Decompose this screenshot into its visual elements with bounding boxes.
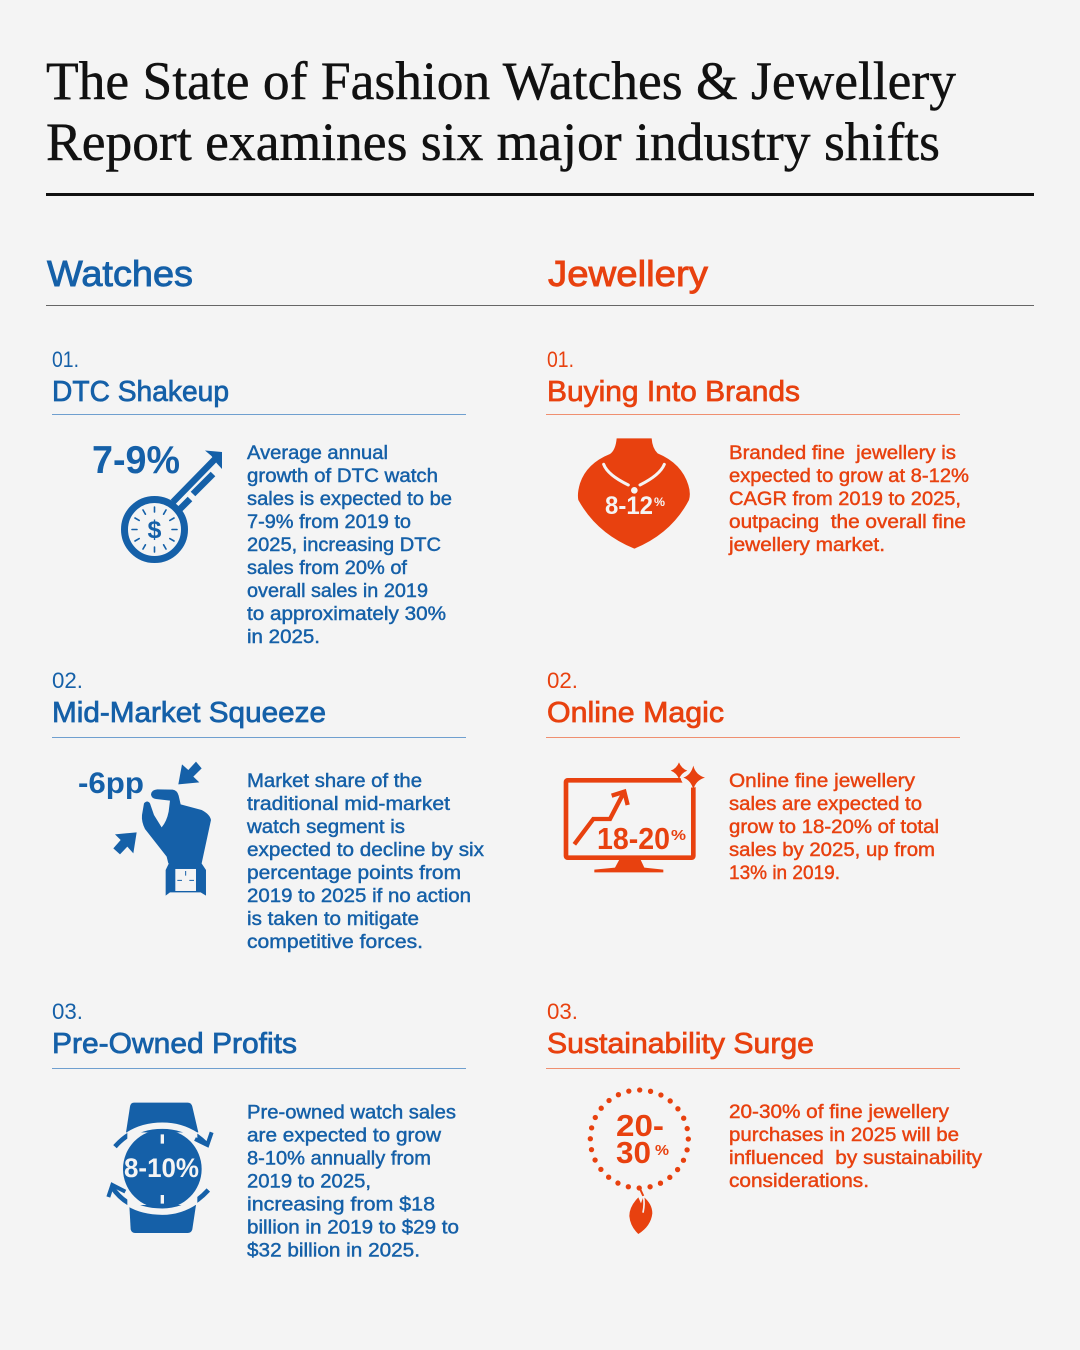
icon: beaded ring with leaf: 20- bbox=[616, 1108, 664, 1143]
description text: is taken to mitigate bbox=[247, 908, 419, 930]
description text: growth of DTC watch bbox=[247, 465, 438, 487]
section heading: DTC Shakeup bbox=[52, 376, 229, 408]
icon: beaded ring with leaf: % bbox=[655, 1142, 669, 1159]
description text: sales from 20% of bbox=[247, 557, 408, 579]
description text: purchases in 2025 will be bbox=[729, 1124, 959, 1146]
panel: jewellery 02 bbox=[546, 668, 960, 884]
icon: pinching hand with watch: -6pp bbox=[78, 767, 144, 800]
section heading: Buying Into Brands bbox=[547, 376, 800, 408]
panel: watches 02 bbox=[52, 668, 484, 953]
description text: increasing from $18 bbox=[247, 1194, 435, 1216]
icon: clock with rising arrow: 7-9% bbox=[92, 439, 180, 482]
section heading: Pre-Owned Profits bbox=[52, 1028, 297, 1060]
description text: considerations. bbox=[729, 1170, 869, 1192]
section number: 03. bbox=[52, 999, 83, 1024]
description text: 2019 to 2025 if no action bbox=[247, 885, 471, 907]
description text bbox=[729, 770, 939, 884]
description text: jewellery market. bbox=[728, 534, 885, 556]
title bbox=[46, 51, 956, 172]
description text: sales is expected to be bbox=[247, 488, 452, 510]
description text: Market share of the bbox=[247, 770, 422, 792]
section heading: Sustainability Surge bbox=[547, 1028, 814, 1060]
icon: beaded ring with leaf: 30 bbox=[616, 1135, 651, 1170]
description text: 8-10% annually from bbox=[247, 1148, 431, 1170]
panel: watches 01 bbox=[52, 347, 466, 648]
description text: competitive forces. bbox=[247, 931, 423, 953]
description text: sales are expected to bbox=[729, 793, 922, 815]
icon: monitor with rising chart: % bbox=[671, 827, 686, 844]
description text: Branded fine jewellery is bbox=[729, 442, 956, 464]
title: The State of Fashion Watches & Jewellery bbox=[46, 51, 956, 111]
description text: 7-9% from 2019 to bbox=[247, 511, 411, 533]
panel: jewellery 01 bbox=[546, 347, 969, 556]
icon: watch with cycle arrows bbox=[108, 1103, 212, 1233]
icon: pinching hand with watch bbox=[78, 762, 211, 896]
description text: are expected to grow bbox=[247, 1124, 442, 1146]
section number: 02. bbox=[52, 668, 83, 693]
description text bbox=[247, 442, 452, 648]
description text: 2019 to 2025, bbox=[247, 1170, 371, 1192]
title: Report examines six major industry shifts bbox=[46, 112, 940, 172]
icon: clock with rising arrow bbox=[92, 439, 222, 560]
icon: monitor with rising chart bbox=[566, 762, 705, 872]
description text: 20-30% of fine jewellery bbox=[729, 1101, 949, 1123]
description text bbox=[246, 770, 484, 953]
description text: billion in 2019 to $29 to bbox=[247, 1216, 459, 1238]
description text: grow to 18-20% of total bbox=[729, 816, 939, 838]
heading: Jewellery: Jewellery bbox=[548, 253, 708, 294]
icon: beaded ring with leaf bbox=[590, 1090, 688, 1234]
description text: in 2025. bbox=[247, 626, 320, 648]
description text: Pre-owned watch sales bbox=[247, 1102, 456, 1124]
description text bbox=[728, 442, 969, 556]
description text: traditional mid-market bbox=[247, 793, 451, 815]
description text: $32 billion in 2025. bbox=[247, 1240, 420, 1262]
icon: watch with cycle arrows: 8-10% bbox=[124, 1153, 199, 1183]
description text: expected to grow at 8-12% bbox=[729, 465, 969, 487]
description text: percentage points from bbox=[247, 862, 461, 884]
description text: to approximately 30% bbox=[247, 603, 446, 625]
icon: clock with rising arrow: $ bbox=[148, 516, 162, 544]
description text: watch segment is bbox=[246, 816, 405, 838]
heading: Watches: Watches bbox=[47, 253, 193, 294]
description text: expected to decline by six bbox=[247, 839, 484, 861]
icon: necklace on bust: % bbox=[654, 495, 665, 509]
section number: 03. bbox=[547, 999, 578, 1024]
section number: 01. bbox=[52, 347, 79, 372]
section number: 02. bbox=[547, 668, 578, 693]
section number: 01. bbox=[547, 347, 574, 372]
panel: jewellery 03 bbox=[546, 999, 982, 1234]
description text: sales by 2025, up from bbox=[729, 839, 935, 861]
panel: watches 03 bbox=[52, 999, 466, 1262]
description text: 2025, increasing DTC bbox=[247, 534, 441, 556]
icon: necklace on bust bbox=[578, 438, 690, 549]
icon: monitor with rising chart: 18-20 bbox=[597, 821, 670, 856]
description text: influenced by sustainability bbox=[729, 1147, 982, 1169]
icon: necklace on bust: 8-12 bbox=[605, 492, 653, 520]
description text: outpacing the overall fine bbox=[729, 511, 966, 533]
description text: overall sales in 2019 bbox=[247, 580, 428, 602]
description text: 13% in 2019. bbox=[729, 862, 840, 884]
section heading: Online Magic bbox=[547, 697, 724, 729]
description text bbox=[247, 1102, 459, 1262]
section heading: Mid-Market Squeeze bbox=[52, 697, 326, 729]
description text bbox=[729, 1101, 982, 1192]
description text: Online fine jewellery bbox=[729, 770, 915, 792]
description text: Average annual bbox=[247, 442, 388, 464]
description text: CAGR from 2019 to 2025, bbox=[729, 488, 961, 510]
